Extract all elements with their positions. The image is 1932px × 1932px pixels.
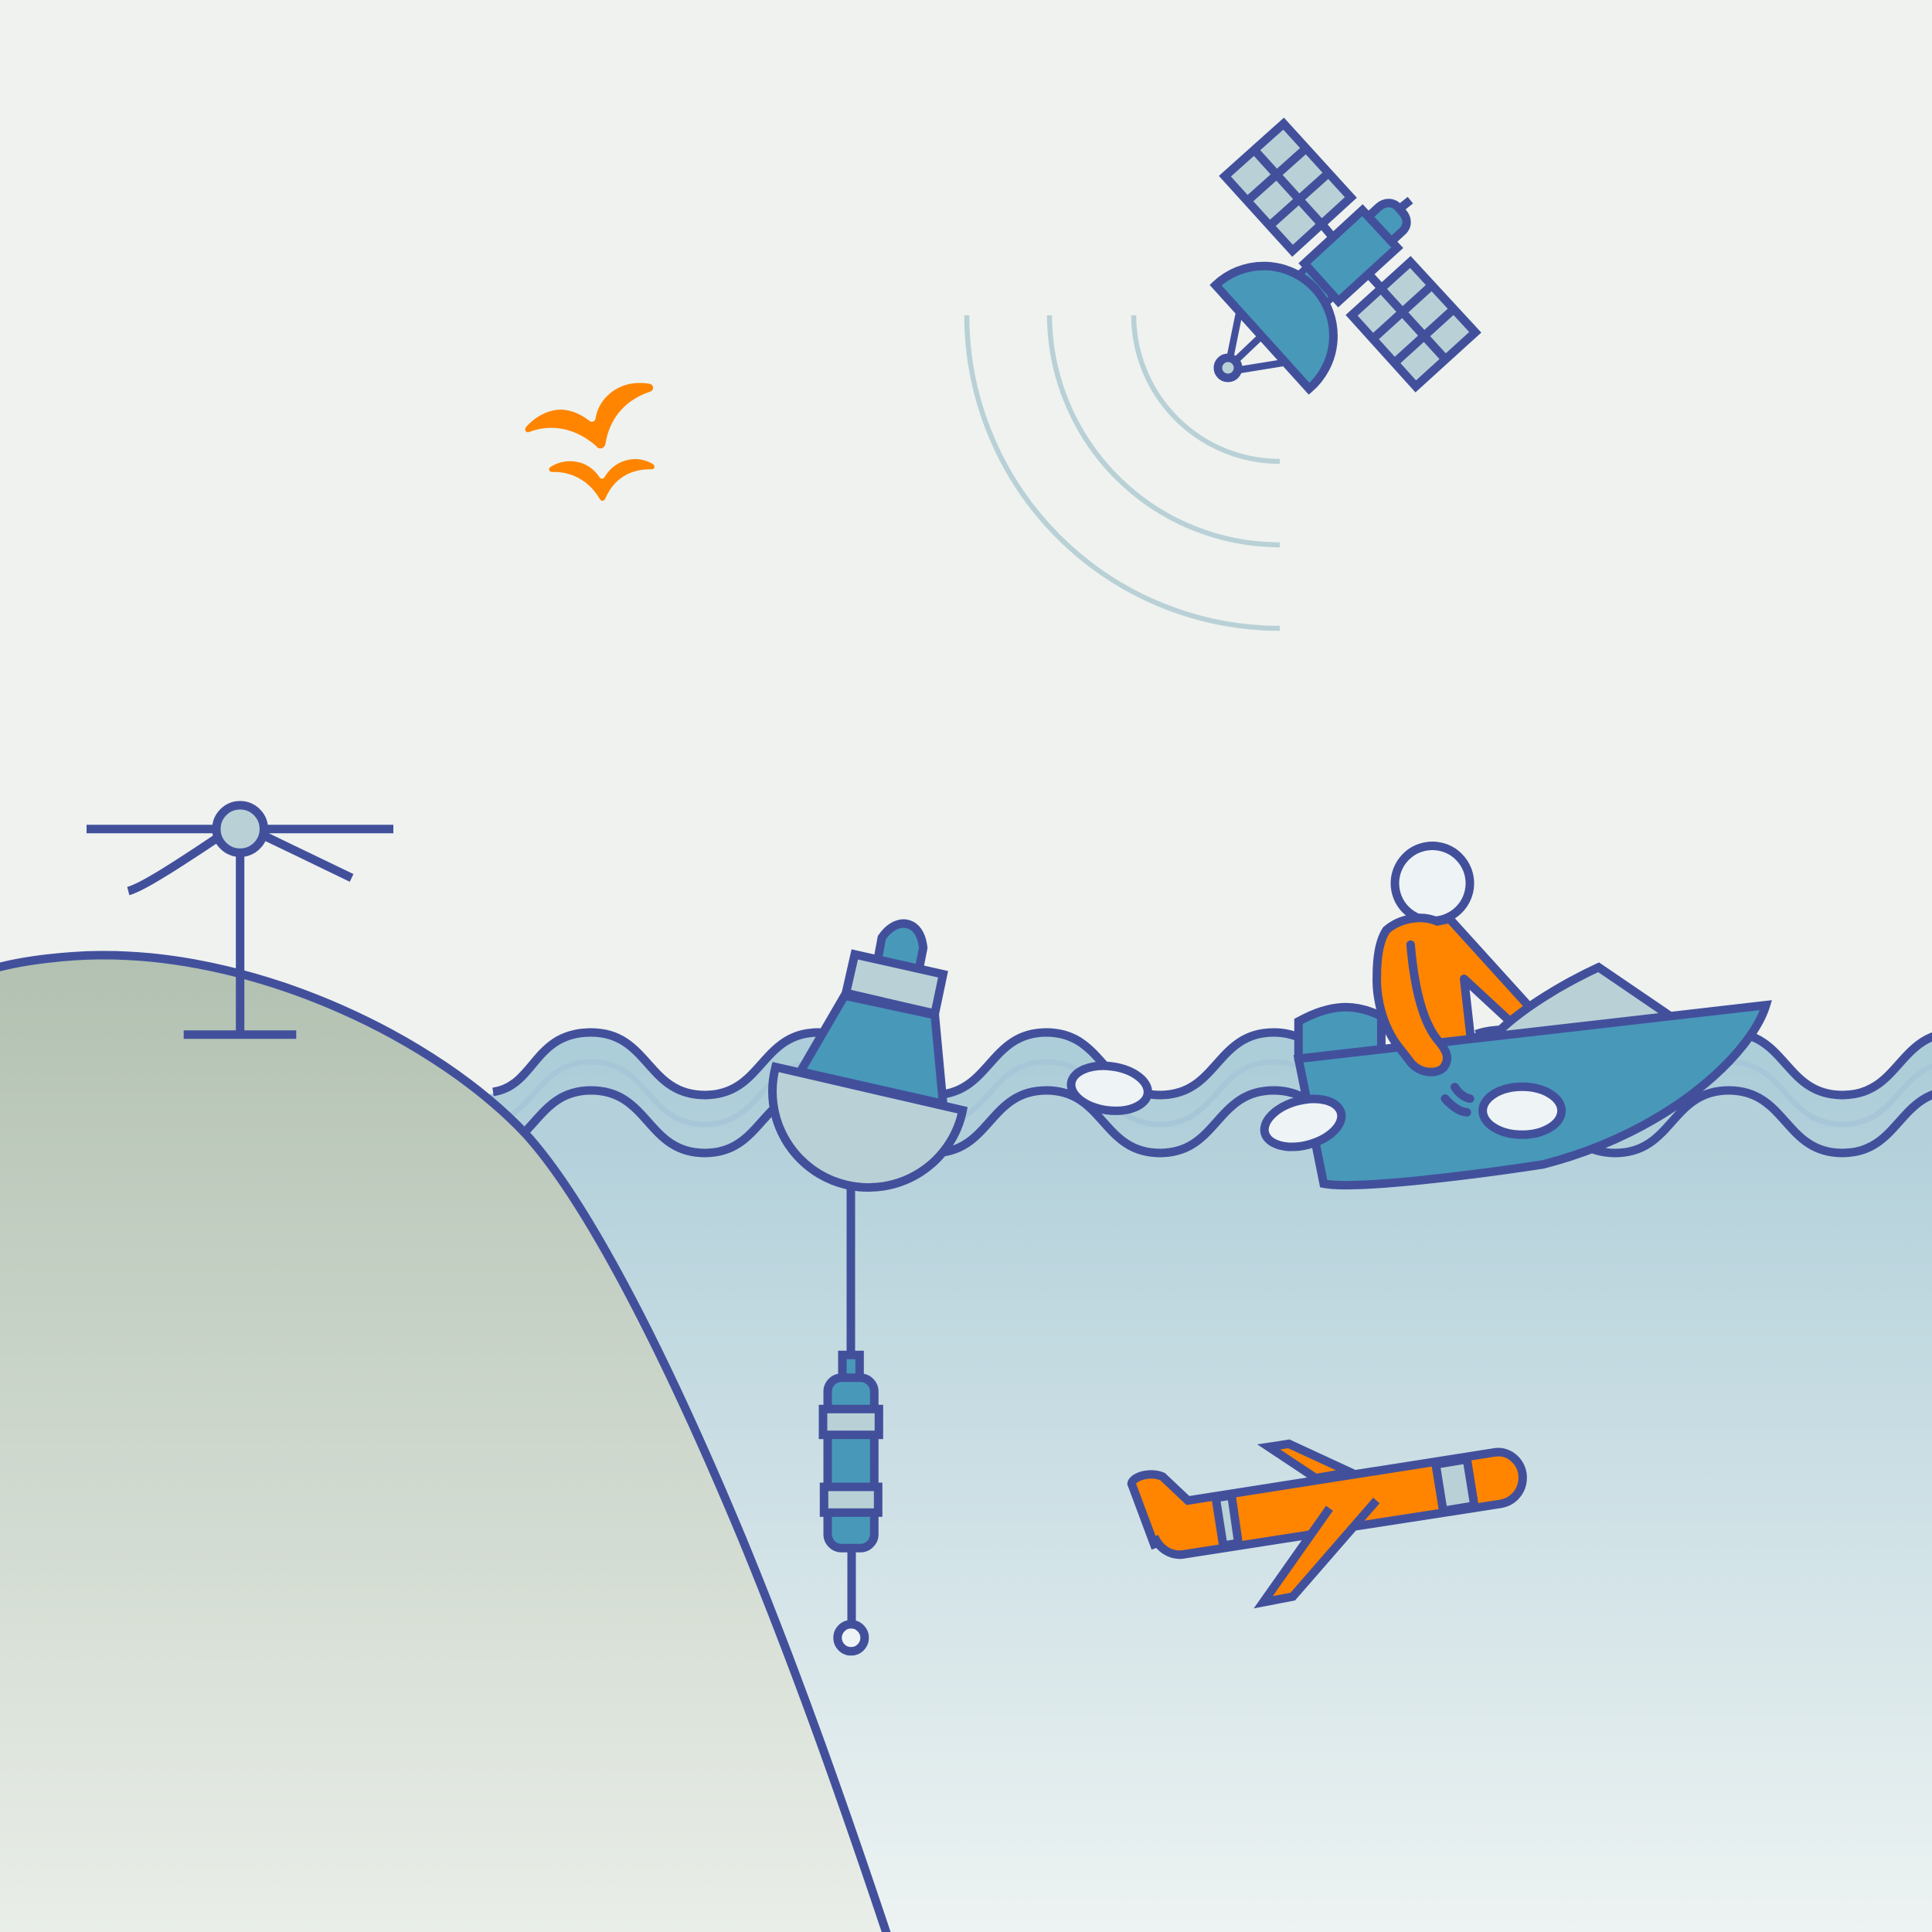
dish struts (1228, 315, 1285, 372)
cabin windscreen (1476, 968, 1678, 1034)
rear wing (1269, 1444, 1350, 1478)
antenna hub (216, 805, 264, 852)
satellite (1216, 124, 1475, 389)
bird small (549, 459, 655, 501)
hull marks (1445, 1087, 1470, 1112)
person head (1395, 845, 1470, 921)
porthole (1483, 1087, 1562, 1134)
dish (1216, 266, 1333, 389)
sensor band lower (824, 1487, 878, 1512)
torso and leg (1383, 920, 1526, 1046)
hill (0, 955, 889, 1932)
dish feed (1218, 358, 1238, 378)
antenna on hill (87, 805, 393, 1035)
stripe nose (1436, 1459, 1475, 1511)
floating disc (1068, 1061, 1151, 1115)
mast and base (184, 850, 296, 1035)
buoy body (801, 995, 943, 1104)
wave band (478, 1032, 1932, 1236)
solar panel upper (1225, 124, 1351, 250)
sensor neck (842, 1355, 859, 1378)
birds (526, 383, 655, 501)
stripe tail (1216, 1495, 1238, 1546)
bird large (526, 383, 653, 448)
upper wave line (493, 1032, 1932, 1095)
rear dome and antenna stub (1369, 200, 1410, 240)
main wing (1264, 1501, 1376, 1602)
dish connector (1298, 267, 1334, 305)
mooring line and sensor (823, 1182, 879, 1651)
underwater glider (1131, 1444, 1522, 1602)
faint middle wave (478, 1062, 1932, 1124)
boat seat (1298, 1007, 1381, 1061)
signal arcs (967, 315, 1280, 628)
sensor body (828, 1378, 874, 1548)
boat with person (1259, 845, 1766, 1185)
sensor band upper (823, 1409, 879, 1435)
sensor weight (838, 1624, 865, 1651)
satellite body (1304, 210, 1397, 301)
buoy float hemisphere (773, 1067, 963, 1188)
fender (1259, 1091, 1347, 1155)
mooring line (851, 1182, 852, 1623)
fuselage (1131, 1452, 1522, 1555)
sea water (478, 1090, 1932, 1932)
torso outline (1451, 920, 1526, 1041)
person arm (1377, 918, 1451, 1072)
buoy lamp (878, 923, 923, 966)
buoy lantern housing (846, 954, 943, 1014)
buoy (773, 923, 963, 1188)
lower wave line (478, 1090, 1932, 1153)
solar panel lower (1352, 262, 1475, 386)
antenna arms (87, 829, 393, 891)
hull (1298, 1005, 1766, 1185)
